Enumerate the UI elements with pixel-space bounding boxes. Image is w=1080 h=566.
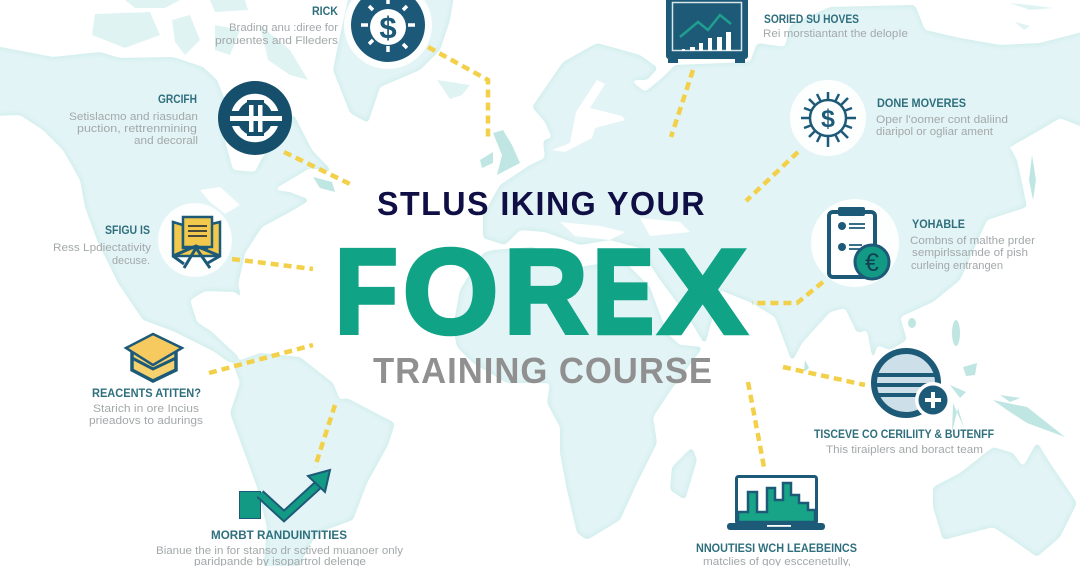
Australia <box>933 442 1077 557</box>
title: E <box>593 225 654 359</box>
Madagascar <box>670 447 697 500</box>
title: STLUS IKING YOUR <box>377 185 706 222</box>
North America <box>0 45 333 363</box>
label: RICK <box>215 6 339 47</box>
Eurasia <box>483 5 1080 362</box>
Africa <box>453 247 703 540</box>
icon: dollar sun <box>790 80 866 156</box>
icon: book on easel <box>158 203 232 277</box>
label: TISCEVE CO CERILIITY & BUTENFF: TISCEVE CO CERILIITY & BUTENFF <box>814 429 994 441</box>
connector lines <box>209 47 865 467</box>
label: RICK: prouentes and Flleders <box>215 35 339 47</box>
icon: laptop chart <box>727 476 825 530</box>
title: O <box>403 224 498 359</box>
icon: monitor chart <box>666 0 748 63</box>
title: TRAINING COURSE <box>373 350 713 391</box>
label: MORBT RANDUINTITIES: MORBT RANDUINTITIES <box>211 530 347 542</box>
label: YOHABLE <box>910 219 1035 272</box>
label: NNOUTIESI WCH LEAEBEINCS: NNOUTIESI WCH LEAEBEINCS <box>696 543 857 555</box>
icon: globe with plus <box>874 351 951 418</box>
South America <box>230 353 395 566</box>
label: MORBT RANDUINTITIES: Bianue the in for stanso dr sctived muanoer only <box>156 545 404 557</box>
label: YOHABLE: curleing entrangen <box>911 260 1003 272</box>
label: REACENTS ATITEN?: Starich in ore Incius <box>93 403 200 415</box>
label: TISCEVE CO CERILIITY & BUTENFF: This tiraiplers and boract team <box>826 444 983 456</box>
icon: dollar coin: $ <box>379 10 397 45</box>
inland seas and bays <box>200 80 1035 345</box>
title: F <box>335 224 398 359</box>
title: X <box>659 224 746 359</box>
label: REACENTS ATITEN?: prieadovs to adurings <box>89 415 204 427</box>
label: NNOUTIESI WCH LEAEBEINCS <box>696 543 857 566</box>
arctic and pacific islands <box>92 0 1053 99</box>
label: SFIGU IS: decuse. <box>112 255 150 267</box>
label: RICK: Brading anu :diree for <box>229 22 338 34</box>
icon: dollar coin <box>344 0 432 69</box>
label: GRCIFH: GRCIFH <box>158 94 197 106</box>
label: SFIGU IS <box>53 225 152 267</box>
label: SORIED SU HOVES <box>763 14 908 40</box>
icon: arrow chart <box>240 470 330 518</box>
label: GRCIFH: Setislacmo and riasudan <box>69 111 198 123</box>
label: TISCEVE CO CERILIITY & BUTENFF <box>814 429 994 456</box>
label: SFIGU IS: Ress Lpdiectativity <box>53 242 152 254</box>
label: REACENTS ATITEN? <box>89 388 204 427</box>
label: DONE MOVERES: diaripol or ogliar ament <box>876 126 993 138</box>
label: YOHABLE: YOHABLE <box>912 219 965 231</box>
title: R <box>504 224 588 358</box>
label: SORIED SU HOVES: SORIED SU HOVES <box>764 14 859 26</box>
label: YOHABLE: Combns of malthe prder <box>910 235 1035 247</box>
label: GRCIFH: puction, rettrenmining <box>77 123 197 135</box>
label: DONE MOVERES: Oper l'oomer cont daliind <box>876 114 1008 126</box>
label: SORIED SU HOVES: Rei morstiantant the delopIe <box>763 28 908 40</box>
label: MORBT RANDUINTITIES <box>156 530 404 566</box>
icon: graduation cap <box>126 334 182 381</box>
label: GRCIFH <box>69 94 198 147</box>
icon: dollar sun: $ <box>821 105 835 133</box>
darker islands: UK, Asia, Oceania <box>313 130 1065 437</box>
label: SFIGU IS: SFIGU IS <box>105 225 150 237</box>
icon: crosshair <box>218 81 292 155</box>
label: DONE MOVERES: DONE MOVERES <box>877 98 966 110</box>
Greenland <box>333 0 455 123</box>
label: DONE MOVERES <box>876 98 1008 138</box>
title <box>335 185 746 391</box>
label: REACENTS ATITEN?: REACENTS ATITEN? <box>92 388 201 400</box>
icon: clipboard with euro: € <box>865 249 879 277</box>
label: YOHABLE: sempirlssamde of pish <box>912 247 1028 259</box>
label: GRCIFH: and decorall <box>134 135 198 147</box>
icon: clipboard with euro <box>811 199 899 287</box>
label: RICK: RICK <box>312 6 339 18</box>
